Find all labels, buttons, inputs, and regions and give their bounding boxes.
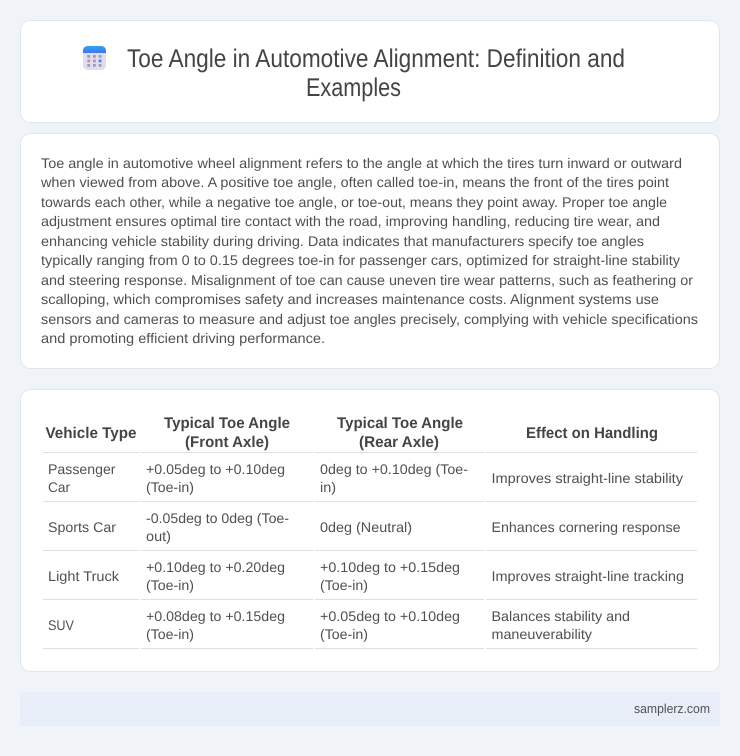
table row: SUV: +0.08deg to +0.15deg <box>146 608 285 624</box>
table row: light truck: (Toe-in) <box>146 577 194 593</box>
table row: light truck: +0.10deg to +0.15deg <box>320 559 460 575</box>
text block: toe angle explanation: scalloping, which compromises safety and increases maintenance costs. Alignment systems use <box>41 291 659 307</box>
title: Toe Angle in Automotive Alignment: Definition and <box>127 45 625 73</box>
table header row: Typical Toe Angle <box>164 415 290 432</box>
text block: toe angle explanation: and promoting efficient driving performance. <box>41 330 325 346</box>
text block: toe angle explanation: sensors and cameras to measure and adjust toe angles precisely, complying with vehicle specifications <box>41 311 698 327</box>
title: Examples <box>306 74 401 102</box>
table row: passenger car: 0deg to +0.10deg (Toe- <box>320 461 468 477</box>
table row: passenger car: Car <box>48 479 70 495</box>
table row: light truck: (Toe-in) <box>320 577 368 593</box>
table row: light truck: +0.10deg to +0.20deg <box>146 559 285 575</box>
table header row <box>46 415 658 451</box>
table row: SUV: Balances stability and <box>492 608 630 624</box>
table row: sports car: out) <box>146 528 171 544</box>
panel: table card <box>20 390 720 672</box>
table row: SUV: maneuverability <box>492 626 592 642</box>
title <box>127 45 625 102</box>
text block: toe angle explanation: when viewed from above. A positive toe angle, often called toe-in, means the front of the tires point <box>40 174 669 190</box>
table row: light truck: Improves straight-line tracking <box>492 568 684 584</box>
text block: toe angle explanation: towards each other, while a negative toe angle, or toe-out, means they point away. Proper toe angle <box>41 194 667 210</box>
table header row: Typical Toe Angle <box>337 415 463 432</box>
panel: description <box>20 134 720 368</box>
table row: light truck <box>48 559 684 593</box>
text block: toe angle explanation: typically ranging from 0 to 0.15 degrees toe-in for passenger cars, optimized for straight-line stability <box>41 252 680 268</box>
table row: sports car: -0.05deg to 0deg (Toe- <box>146 510 289 526</box>
text block: toe angle explanation: and steering response. Misalignment of toe can cause uneven tire wear patterns, such as feathering or <box>41 272 693 288</box>
table row: light truck: Light Truck <box>48 568 120 584</box>
table row lines <box>43 452 697 649</box>
table row: SUV: SUV <box>48 617 75 633</box>
text block: toe angle explanation: adjustment ensures optimal tire contact with the road, improving handling, reducing tire wear, and <box>41 213 660 229</box>
table row: passenger car: Improves straight-line stability <box>492 470 683 486</box>
table row: passenger car: in) <box>320 479 336 495</box>
text block: toe angle explanation: Toe angle in automotive wheel alignment refers to the angle at which the tires turn inward or outward <box>41 155 682 171</box>
panel: title card <box>20 20 720 122</box>
table header row: Vehicle Type <box>46 425 137 442</box>
table row: sports car: Enhances cornering response <box>492 519 681 535</box>
text block: toe angle explanation: enhancing vehicle stability during driving. Data indicates that manufacturers specify toe angles <box>41 233 644 249</box>
table row: SUV: (Toe-in) <box>146 626 194 642</box>
table header row: Effect on Handling <box>526 425 658 442</box>
table row: passenger car: (Toe-in) <box>146 479 194 495</box>
table row: passenger car: Passenger <box>48 461 116 477</box>
table header row: (Front Axle) <box>185 434 269 451</box>
table row: SUV: (Toe-in) <box>320 626 368 642</box>
table row: sports car <box>48 510 681 544</box>
table header row: (Rear Axle) <box>359 434 439 451</box>
text block: toe angle explanation <box>40 155 698 346</box>
table row: sports car: Sports Car <box>48 519 116 535</box>
footer <box>20 692 720 726</box>
table row: passenger car <box>48 461 683 495</box>
table row: SUV <box>48 608 630 642</box>
table row: sports car: 0deg (Neutral) <box>320 519 412 535</box>
table row: SUV: +0.05deg to +0.10deg <box>320 608 460 624</box>
table row: passenger car: +0.05deg to +0.10deg <box>146 461 285 477</box>
footer source text: samplerz.com <box>634 701 710 716</box>
icon: calendar <box>83 46 106 70</box>
